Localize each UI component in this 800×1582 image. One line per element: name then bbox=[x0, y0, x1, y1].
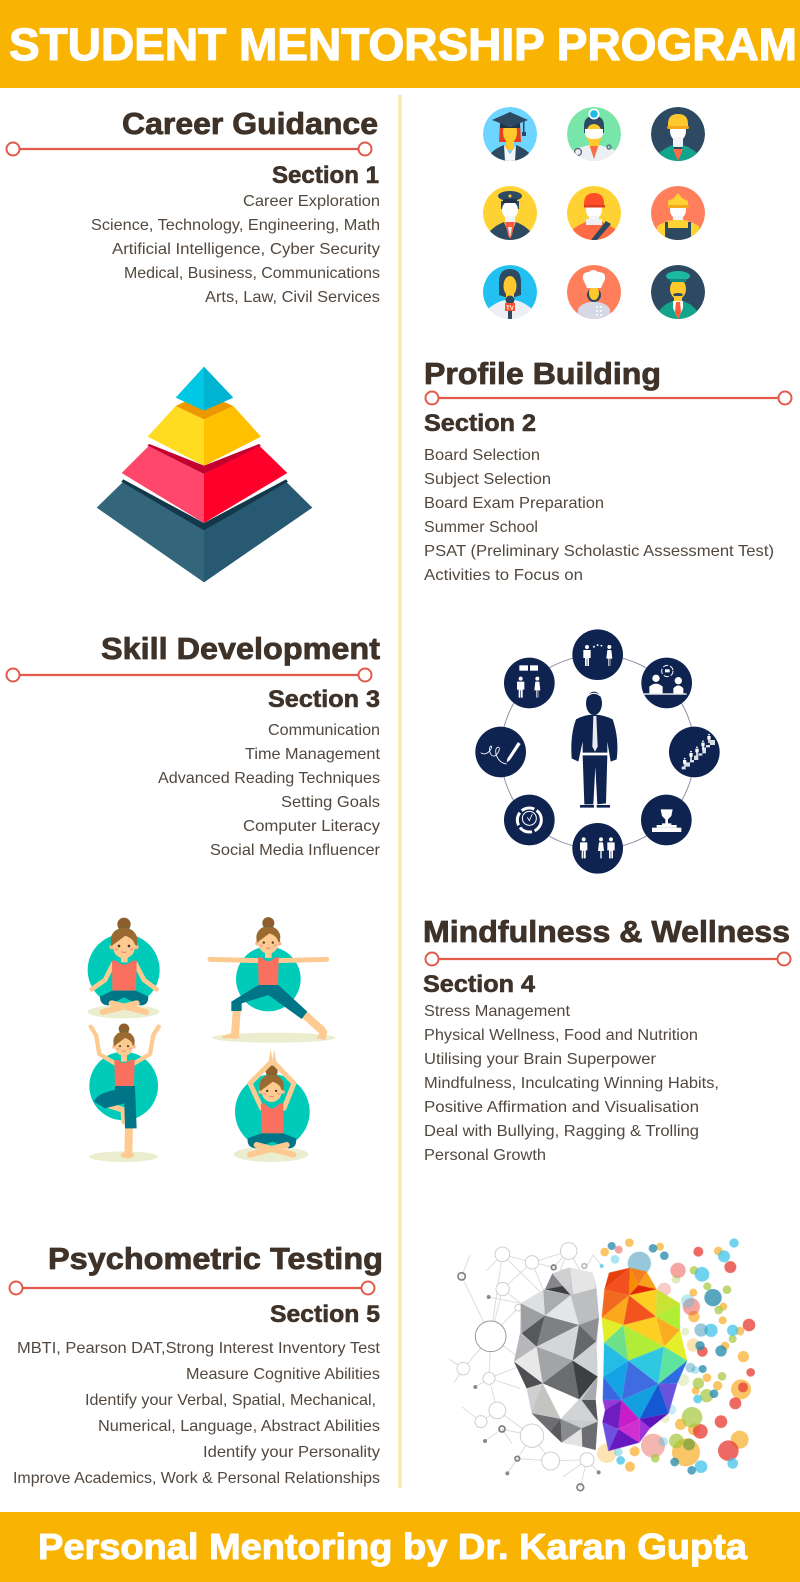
topic list: Deal with Bullying, Ragging & Trolling bbox=[424, 1123, 699, 1140]
topic list: Computer Literacy bbox=[243, 818, 380, 835]
avatar: construction worker bbox=[651, 186, 705, 240]
topic list bbox=[424, 1003, 719, 1164]
heading: career guidance: Career Guidance bbox=[122, 106, 378, 141]
connector line bbox=[426, 952, 790, 966]
footer text: Personal Mentoring by Dr. Karan Gupta bbox=[38, 1526, 748, 1567]
small icon: trophy bbox=[652, 809, 681, 832]
topic list: Communication bbox=[268, 722, 380, 739]
icon: yoga poses bbox=[87, 917, 336, 1162]
topic list: Medical, Business, Communications bbox=[124, 265, 380, 282]
topic list: Setting Goals bbox=[281, 794, 380, 811]
title: STUDENT MENTORSHIP PROGRAM bbox=[9, 19, 797, 70]
small icon: signature pen bbox=[481, 742, 521, 764]
topic list: Numerical, Language, Abstract Abilities bbox=[98, 1418, 380, 1435]
topic list: Arts, Law, Civil Services bbox=[205, 289, 380, 306]
section label: Section 3 bbox=[268, 686, 380, 713]
panel: career guidance bbox=[6, 106, 380, 306]
heading: mindfulness and wellness: Mindfulness & Wellness bbox=[423, 914, 790, 949]
topic list: Identify your Personality bbox=[203, 1444, 380, 1461]
topic list: Improve Academics, Work & Personal Relationships bbox=[13, 1470, 380, 1487]
heading: skill development: Skill Development bbox=[101, 631, 380, 666]
topic list: Activities to Focus on bbox=[424, 567, 583, 584]
topic list: MBTI, Pearson DAT,Strong Interest Inventory Test bbox=[17, 1340, 381, 1357]
topic list: Advanced Reading Techniques bbox=[158, 770, 380, 787]
pose: warrior bbox=[210, 917, 336, 1043]
panel: psychometric testing bbox=[10, 1241, 383, 1487]
avatar: doctor bbox=[567, 107, 621, 161]
topic list: Positive Affirmation and Visualisation bbox=[424, 1099, 699, 1116]
small icon: meeting bbox=[644, 665, 687, 695]
avatar: delivery worker bbox=[567, 186, 621, 240]
topic list: Science, Technology, Engineering, Math bbox=[91, 217, 380, 234]
topic list: Measure Cognitive Abilities bbox=[186, 1366, 380, 1383]
section label: Section 2 bbox=[424, 410, 536, 437]
small icon: group discussion bbox=[580, 837, 615, 858]
icon: brain illustration bbox=[449, 1238, 755, 1491]
pose: lotus with raised hands bbox=[234, 1049, 310, 1162]
topic list: Mindfulness, Inculcating Winning Habits, bbox=[424, 1075, 719, 1092]
topic list: Social Media Influencer bbox=[210, 842, 381, 859]
pose: tree bbox=[89, 1023, 159, 1162]
section label: Section 5 bbox=[270, 1301, 380, 1328]
topic list: Physical Wellness, Food and Nutrition bbox=[424, 1027, 698, 1044]
icon: profession avatars bbox=[483, 107, 705, 319]
avatar: police officer bbox=[483, 186, 537, 240]
footer banner bbox=[0, 1512, 800, 1582]
topic list: Personal Growth bbox=[424, 1147, 546, 1164]
topic list: Career Exploration bbox=[243, 193, 380, 210]
topic list: Summer School bbox=[424, 519, 538, 536]
topic list: Time Management bbox=[245, 746, 381, 763]
topic list bbox=[424, 447, 774, 584]
panel: mindfulness and wellness bbox=[423, 914, 790, 1164]
topic list bbox=[158, 722, 381, 859]
small icon: time clock bbox=[517, 808, 541, 832]
panel: profile building bbox=[424, 356, 792, 584]
panel: skill development bbox=[6, 631, 381, 859]
heading: profile building: Profile Building bbox=[424, 356, 661, 391]
connector line bbox=[6, 668, 372, 682]
topic list: Board Selection bbox=[424, 447, 540, 464]
neural network bbox=[449, 1243, 602, 1491]
topic list: Artificial Intelligence, Cyber Security bbox=[112, 241, 380, 258]
small icon: two people with dots bbox=[583, 645, 612, 666]
avatar: pilot bbox=[651, 265, 705, 319]
section label: Section 4 bbox=[423, 971, 536, 998]
coloured bubbles bbox=[597, 1238, 755, 1475]
avatar: engineer bbox=[651, 107, 705, 161]
connector line bbox=[6, 142, 372, 156]
avatar: TV reporter bbox=[483, 265, 537, 319]
connector line bbox=[426, 392, 792, 404]
heading: psychometric testing: Psychometric Testing bbox=[48, 1241, 383, 1276]
central mentor figure bbox=[571, 692, 617, 808]
header banner bbox=[0, 0, 800, 88]
small icon: two people talking bbox=[517, 665, 540, 698]
center divider bbox=[398, 95, 402, 1488]
avatar: graduate bbox=[483, 107, 537, 161]
topic list: Utilising your Brain Superpower bbox=[424, 1051, 657, 1068]
icon: mentor network diagram bbox=[475, 629, 720, 874]
topic list: Stress Management bbox=[424, 1003, 571, 1020]
section label: Section 1 bbox=[272, 162, 379, 189]
small icon: career stairs bbox=[682, 734, 715, 773]
topic list bbox=[13, 1340, 381, 1487]
topic list: PSAT (Preliminary Scholastic Assessment Test) bbox=[424, 543, 774, 560]
topic list: Board Exam Preparation bbox=[424, 495, 604, 512]
icon: pyramid bbox=[97, 367, 312, 582]
avatar: chef bbox=[567, 265, 621, 319]
pose: meditation bbox=[87, 918, 160, 1018]
avatar: TV reporter: TV bbox=[506, 306, 514, 312]
rainbow right hemisphere bbox=[602, 1268, 687, 1451]
topic list: Subject Selection bbox=[424, 471, 551, 488]
topic list bbox=[91, 193, 380, 306]
grey left hemisphere bbox=[514, 1268, 599, 1450]
topic list: Identify your Verbal, Spatial, Mechanical, bbox=[85, 1392, 376, 1409]
connector line bbox=[10, 1282, 374, 1294]
